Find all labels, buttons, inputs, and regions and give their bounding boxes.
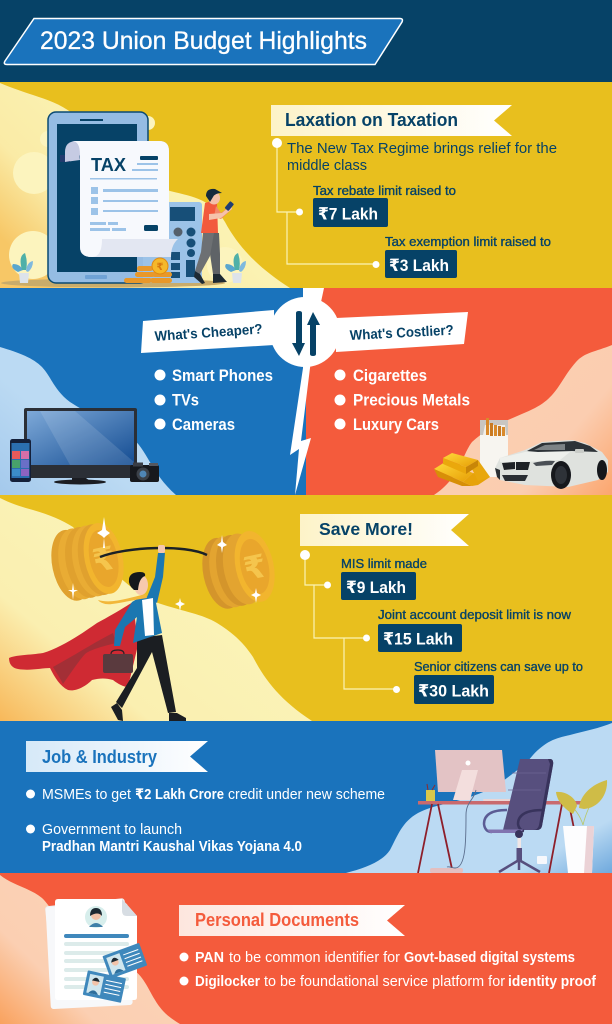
pencil cup [426, 784, 435, 801]
briefcase [103, 650, 133, 673]
bullet: Digilocker: identity proof [508, 974, 596, 990]
connector tree [272, 138, 380, 268]
coin weight left [45, 519, 130, 604]
plant left [12, 253, 33, 283]
rebate figure: ₹7 Lakh [318, 204, 378, 224]
illustration: tax phone and person [1, 112, 246, 288]
header band [0, 0, 612, 82]
illustration: identity documents [45, 898, 147, 1009]
head [129, 572, 148, 595]
ribbon heading [300, 514, 469, 546]
blob: light blue [0, 347, 176, 495]
senior citizens figure: Senior citizens can save up to [414, 660, 583, 674]
blob: light orange [434, 345, 612, 495]
icon: television [24, 408, 137, 484]
intro text: The New Tax Regime brings relief for the [287, 140, 557, 157]
coins: ₹ [157, 262, 164, 273]
joint account figure: Joint account deposit limit is now [378, 608, 572, 622]
exemption figure: Tax exemption limit raised to [385, 235, 551, 249]
trousers [116, 635, 176, 713]
list: costlier items: Luxury Cars [353, 416, 439, 434]
circle and arrows [270, 297, 340, 367]
panel: save more [0, 495, 612, 721]
profile avatar [85, 906, 107, 928]
arrow: down [292, 311, 305, 356]
ribbon heading: Laxation on Taxation [285, 110, 458, 130]
jacket [114, 596, 162, 646]
office chair [484, 759, 553, 872]
icon: luxury car [495, 440, 608, 489]
plant right [225, 253, 246, 283]
illustration: superhero lifting coin barbell [9, 517, 281, 721]
shirt [142, 598, 154, 636]
bullet: MSMEs: ₹2 Lakh Crore [135, 787, 224, 803]
phone [48, 112, 148, 283]
cape [9, 602, 138, 690]
bullet: government [26, 822, 302, 855]
bullet: MSMEs [26, 787, 385, 803]
senior citizens figure: ₹30 Lakh [418, 682, 489, 700]
icon: camera [130, 462, 159, 482]
rebate figure [313, 184, 456, 227]
ribbon heading: Job & Industry [42, 747, 157, 767]
text lines [64, 934, 129, 989]
illustration: office desk [418, 750, 607, 873]
shoes [111, 703, 123, 721]
coin weight right: ₹ [240, 548, 269, 587]
calculator [143, 202, 202, 283]
ribbon heading [26, 741, 208, 772]
icon: cigarette pack [480, 418, 508, 477]
desk [418, 801, 585, 873]
icon: gold bars [434, 453, 490, 486]
id card upper [102, 943, 147, 979]
tax receipt [60, 141, 178, 257]
raised arm [147, 553, 165, 603]
bullet: government: Pradhan Mantri Kaushal Vikas Yojana 4.0 [42, 839, 302, 855]
ribbon heading: Save More! [319, 519, 413, 539]
lightning divider [290, 288, 324, 495]
ribbon heading [271, 105, 512, 136]
exemption figure: ₹3 Lakh [389, 256, 449, 275]
potted plant [556, 780, 607, 873]
list: cheaper items: Smart Phones [172, 367, 273, 385]
barbell [100, 548, 207, 557]
title banner [4, 18, 402, 64]
bullet: PAN: to be common identifier for [229, 950, 400, 966]
bullet: PAN [180, 950, 575, 966]
list: cheaper items [154, 367, 273, 434]
label: what's cheaper [141, 310, 274, 353]
icon: smartphone [10, 439, 31, 482]
tax receipt: TAX [91, 154, 127, 175]
exemption figure [385, 235, 551, 278]
list: costlier items [334, 367, 470, 434]
sparkles [68, 517, 261, 611]
wall socket [537, 856, 547, 864]
joint account figure [378, 608, 572, 652]
title banner: 2023 Union Budget Highlights [40, 27, 367, 55]
back paper [45, 898, 135, 1009]
id card lower [83, 970, 126, 1003]
front paper [55, 899, 137, 1000]
list: costlier items: Precious Metals [353, 392, 470, 410]
bullet: MSMEs: credit under new scheme [228, 787, 385, 803]
senior citizens figure [414, 660, 583, 704]
joint account figure: ₹15 Lakh [383, 630, 453, 648]
ribbon heading: Personal Documents [195, 910, 359, 930]
coins [124, 258, 172, 283]
bullet: Digilocker [180, 974, 596, 990]
intro text [287, 140, 557, 174]
bullet: PAN: PAN [195, 950, 224, 966]
bullet: Digilocker: to be foundational service platform for [264, 974, 505, 990]
label: what's costlier: What's Costlier? [349, 322, 454, 343]
coin weight left: ₹ [89, 540, 118, 579]
monitor [435, 750, 520, 801]
label: what's costlier [336, 312, 468, 352]
panel: personal documents [0, 873, 612, 1024]
list: cheaper items: TVs [172, 392, 199, 410]
label: what's cheaper: What's Cheaper? [154, 320, 263, 344]
bullet: MSMEs: MSMEs to get [42, 787, 131, 803]
MIS figure: MIS limit made [341, 557, 427, 571]
panel: cheaper versus costlier [0, 288, 612, 495]
MIS figure [341, 557, 427, 600]
list: costlier items: Cigarettes [353, 367, 427, 385]
connector tree [300, 550, 400, 693]
person with phone [194, 189, 234, 284]
intro text: middle class [287, 157, 367, 174]
panel: laxation on taxation [0, 82, 612, 289]
MIS figure: ₹9 Lakh [346, 578, 406, 597]
tie [98, 594, 147, 604]
list: cheaper items: Cameras [172, 416, 235, 434]
bullet: government: Government to launch [42, 822, 182, 838]
bullet: PAN: Govt-based digital systems [404, 950, 575, 966]
ribbon heading [179, 905, 405, 936]
bullet: Digilocker: Digilocker [195, 974, 260, 990]
coin weight right [196, 527, 281, 612]
rebate figure: Tax rebate limit raised to [313, 184, 456, 198]
panel: job and industry [0, 721, 612, 873]
cable [447, 790, 476, 868]
arrow: up [307, 312, 320, 356]
